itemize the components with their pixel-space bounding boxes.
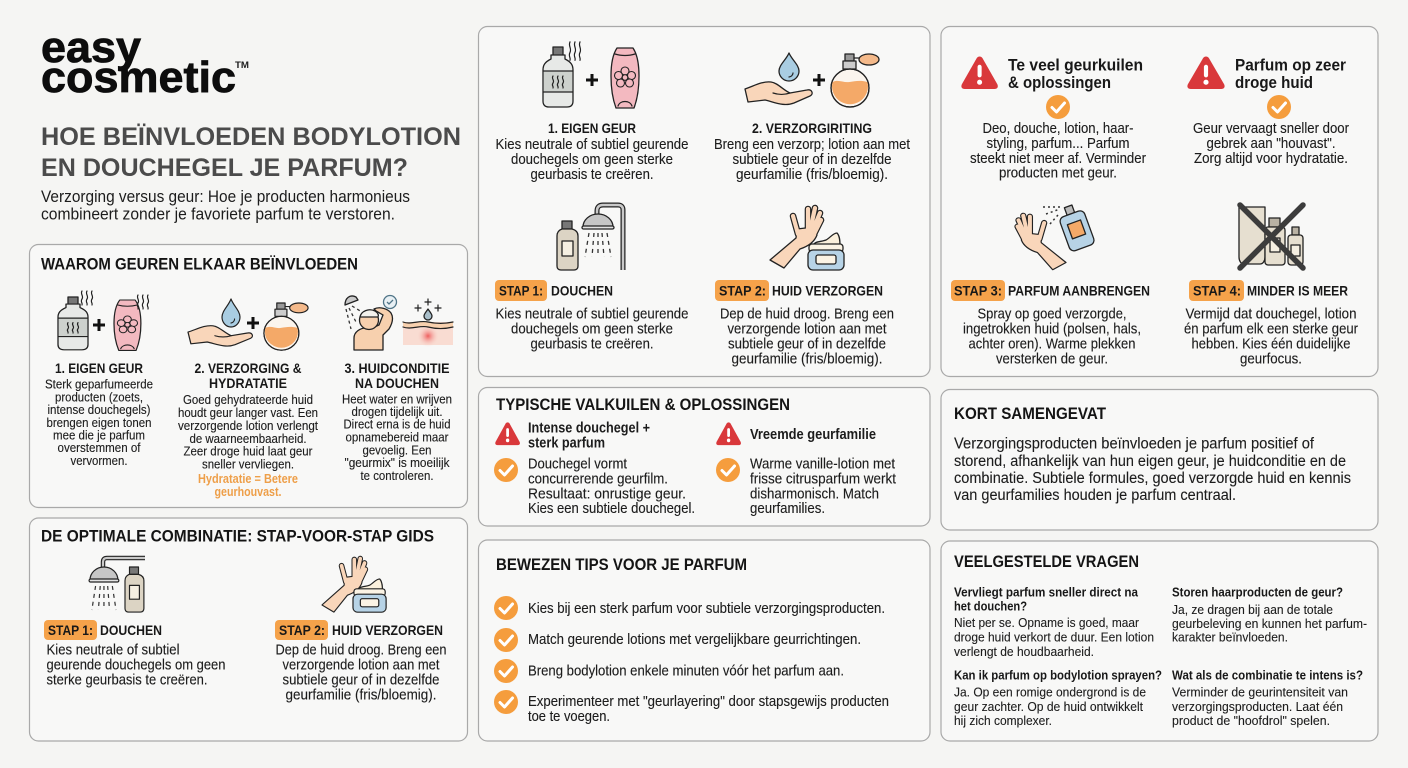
text: te veel geurkuilen: producten met geur. (999, 166, 1117, 182)
icon: crossed-out products (1239, 205, 1303, 268)
step 3 text: versterken de geur. (996, 352, 1108, 368)
step 4 text: Vermijd dat douchegel, lotion (1186, 306, 1356, 322)
step 1 text: Kies neutrale of subtiel geurende (496, 306, 688, 322)
step 2 text: Dep de huid droog. Breng een (720, 306, 894, 322)
faq 3 (954, 667, 1162, 728)
icon: check (1267, 95, 1291, 119)
heading: te veel geurkuilen: Te veel geurkuilen (1008, 56, 1143, 74)
step 3 text: ingetrokken huid (polsen, hals, (963, 322, 1141, 338)
step 3 badge: STAP 3: (954, 282, 1002, 298)
text: huidconditie na douchen: NA DOUCHEN (355, 375, 439, 391)
step 3 text (963, 306, 1141, 368)
step 1 text (46, 642, 226, 688)
text: verzorging: geurfamilie (fris/bloemig). (736, 167, 888, 183)
tip 2 (494, 628, 861, 652)
step 1 badge: DOUCHEN (100, 622, 162, 638)
heading: parfum op zeer droge huid: droge huid (1235, 74, 1313, 92)
step 1 badge (495, 280, 613, 301)
step 1 text: Kies neutrale of subtiel (46, 642, 180, 658)
highlight text: geurhouvast. (214, 485, 282, 499)
text: eigen geur: geurbasis te creëren. (530, 167, 654, 183)
heading: BEWEZEN TIPS VOOR JE PARFUM (496, 555, 747, 574)
heading: parfum op zeer droge huid: Parfum op zeer (1235, 56, 1347, 74)
icon: warning (961, 56, 998, 89)
step 1 badge: STAP 1: (499, 282, 543, 298)
step 1 badge: STAP 1: (48, 622, 93, 638)
summary text: combinatie. Subtiele formules, goed verzorgde huid en kennis (954, 470, 1351, 487)
faq 4: product de "hoofdrol" spelen. (1172, 713, 1330, 728)
tip 2: Match geurende lotions met vergelijkbare geurrichtingen. (528, 632, 861, 648)
faq 1: droge huid verkort de duur. Een lotion (954, 630, 1154, 645)
tip 4: toe te voegen. (528, 709, 610, 725)
text: eigen geur: 1. EIGEN GEUR (55, 360, 143, 376)
text: eigen geur: overstemmen of (58, 440, 141, 455)
summary text (954, 436, 1351, 504)
step 1 text: douchegels om geen sterke (511, 322, 673, 338)
faq 3: hij zich complexer. (954, 713, 1052, 728)
step 2 text: subtiele geur of in dezelfde (282, 672, 440, 688)
icon: hand and perfume spray (1018, 202, 1095, 270)
step 2 text: geurfamilie (fris/bloemig). (286, 688, 436, 704)
icon: warning (495, 422, 520, 445)
panel: waarom geuren elkaar beïnvloeden (30, 244, 468, 508)
faq 4: Wat als de combinatie te intens is? (1172, 667, 1363, 682)
heading: parfum op zeer droge huid (1235, 56, 1347, 92)
faq 4 (1172, 667, 1363, 728)
heading: te veel geurkuilen: & oplossingen (1008, 74, 1111, 92)
text: huidconditie na douchen: Direct erna is de huid (344, 416, 450, 432)
text: huidconditie na douchen: 3. HUIDCONDITIE (344, 360, 450, 376)
step 2 text: verzorgende lotion aan met (282, 658, 440, 674)
step 4 text: hebben. Kies één duidelijke (1192, 336, 1350, 352)
faq 4: Verminder de geurintensiteit van (1172, 685, 1348, 700)
tip 1 (494, 596, 885, 620)
step 2 text: geurfamilie (fris/bloemig). (732, 352, 882, 368)
step 3 text: Spray op goed verzorgde, (978, 306, 1126, 322)
icon: shower and bottle (89, 558, 145, 612)
text: te veel geurkuilen (970, 121, 1146, 182)
step 2 badge: STAP 2: (719, 282, 766, 298)
panel: valkuilen en stappen 3 en 4 (941, 26, 1378, 376)
text: verzorging en hydratatie: HYDRATATIE (209, 375, 287, 391)
text: eigen geur: douchegels om geen sterke (511, 152, 673, 168)
step 2 text: Dep de huid droog. Breng een (276, 642, 446, 658)
logo: TM (235, 60, 249, 70)
icon: check (494, 458, 518, 482)
pitfall title: intense douchegel (528, 421, 650, 452)
text: parfum op droge huid: gebrek aan "houvast". (1206, 136, 1336, 152)
faq 2: Storen haarproducten de geur? (1172, 585, 1343, 600)
text: huidconditie na douchen: drogen tijdelijk uit. (352, 404, 442, 419)
panel: bewezen tips (478, 540, 930, 741)
step 4 text: geurfocus. (1240, 352, 1302, 368)
logo (41, 23, 249, 102)
step 2 text: subtiele geur of in dezelfde (728, 336, 886, 352)
text: huidconditie na douchen (342, 360, 452, 483)
subtitle: Verzorging versus geur: Hoe je producten harmonieus (41, 188, 410, 206)
tip 4: Experimenteer met "geurlayering" door stapsgewijs producten (528, 694, 889, 710)
text: huidconditie na douchen: opnamebereid maar (346, 430, 449, 444)
panel: kort samengevat (941, 390, 1378, 530)
step 3 text: achter oren). Warme plekken (968, 336, 1136, 352)
tip 1: Kies bij een sterk parfum voor subtiele verzorgingsproducten. (528, 601, 885, 617)
icon: warning (716, 422, 741, 445)
icon: person showering and skin cross-section (345, 296, 453, 350)
text: huidconditie na douchen: te controleren. (360, 468, 434, 483)
step 2 badge: STAP 2: (279, 622, 325, 638)
text: verzorging en hydratatie: Goed gehydrateerde huid (183, 392, 313, 407)
title: EN DOUCHEGEL JE PARFUM? (41, 154, 408, 182)
text: verzorging en hydratatie: de waarneembaarheid. (190, 431, 306, 446)
pitfall title: vreemde geurfamilie: Vreemde geurfamilie (750, 427, 876, 443)
icon: check (716, 458, 740, 482)
faq 2 (1172, 585, 1367, 645)
text: verzorging: Breng een verzorp; lotion aan met (714, 137, 910, 153)
text: eigen geur: Sterk geparfumeerde (45, 376, 153, 392)
text: eigen geur: intense douchegels) (48, 402, 150, 417)
text: eigen geur: vervormen. (70, 453, 128, 468)
text: huidconditie na douchen: "geurmix" is moeilijk (344, 455, 450, 470)
subtitle (41, 188, 410, 224)
text: parfum op droge huid: Zorg altijd voor hydratatie. (1194, 151, 1348, 167)
pitfall solution text: Warme vanille-lotion met (750, 456, 895, 472)
step 2 badge: HUID VERZORGEN (332, 622, 443, 638)
text: te veel geurkuilen: steekt niet meer af. Verminder (970, 151, 1146, 167)
text: parfum op droge huid: Geur vervaagt sneller door (1193, 121, 1349, 137)
tip 4 (494, 690, 889, 725)
icon: bottle plus shower gel (543, 42, 639, 108)
summary text: van geurfamilies houden je parfum centraal. (954, 487, 1236, 504)
text: verzorging en hydratatie (178, 360, 318, 499)
icon: bottle plus shower gel (58, 291, 149, 350)
text: huidconditie na douchen: Heet water en wrijven (342, 392, 452, 406)
pitfall solution text: concurrerende geurfilm. (528, 472, 668, 488)
faq 3: geur zachter. Op de huid ontwikkelt (954, 699, 1143, 714)
panel: veelgestelde vragen (941, 541, 1378, 741)
icon: check (1046, 95, 1070, 119)
faq 2: karakter beïnvloeden. (1172, 630, 1288, 645)
text: huidconditie na douchen: gevoelig. Een (362, 442, 432, 458)
logo: easy (41, 23, 142, 72)
text: te veel geurkuilen: Deo, douche, lotion, haar- (982, 121, 1134, 137)
step 1 text (496, 306, 688, 352)
faq 2: Ja, ze dragen bij aan de totale (1172, 602, 1333, 617)
tip 3: Breng bodylotion enkele minuten vóór het parfum aan. (528, 664, 844, 680)
step 2 text: verzorgende lotion aan met (728, 322, 886, 338)
faq 1: verlengt de houdbaarheid. (954, 644, 1094, 659)
faq 3: Ja. Op een romige ondergrond is de (954, 685, 1146, 700)
text: eigen geur: mee die je parfum (53, 428, 145, 442)
title (41, 123, 461, 182)
logo: cosmetic (41, 53, 236, 102)
subtitle: combineert zonder je favoriete parfum te verstoren. (41, 206, 395, 224)
faq 1: het douchen? (954, 599, 1027, 614)
text: verzorging en hydratatie: verzorgende lotion verlengt (178, 418, 318, 433)
step 1 badge: DOUCHEN (551, 282, 613, 298)
icon: warning (1187, 56, 1225, 89)
faq 2: geurbeleving en kunnen het parfum- (1172, 616, 1367, 631)
text: verzorging en hydratatie: sneller vervliegen. (202, 456, 294, 472)
heading: VEELGESTELDE VRAGEN (954, 552, 1139, 571)
heading: KORT SAMENGEVAT (954, 404, 1107, 423)
title: HOE BEÏNVLOEDEN BODYLOTION (41, 123, 461, 151)
heading: DE OPTIMALE COMBINATIE: STAP-VOOR-STAP GIDS (41, 526, 434, 546)
heading: te veel geurkuilen (1008, 56, 1143, 92)
step 2 badge (275, 620, 443, 640)
summary text: Verzorgingsproducten beïnvloeden je parfum positief of (954, 436, 1315, 452)
summary text: storend, afhankelijk van hun eigen geur, je huidconditie en de (954, 453, 1346, 470)
pitfall solution text: Douchegel vormt (528, 456, 627, 472)
pitfall title: intense douchegel: Intense douchegel + (528, 421, 650, 437)
step 1 badge (44, 620, 162, 640)
pitfall solution text (528, 456, 695, 517)
text: eigen geur: 1. EIGEN GEUR (548, 120, 636, 136)
text: eigen geur: brengen eigen tonen (46, 415, 152, 430)
step 3 badge (951, 280, 1150, 301)
tip 3 (494, 659, 844, 683)
panel: stappen 1 en 2 (478, 26, 930, 376)
pitfall solution text: disharmonisch. Match (750, 486, 879, 502)
step 3 badge: PARFUM AANBRENGEN (1008, 282, 1150, 298)
faq 1: Vervliegt parfum sneller direct na (954, 585, 1139, 600)
faq 4: verzorgingsproducten. Laat één (1172, 699, 1343, 714)
pitfall solution text: frisse citrusparfum werkt (750, 472, 896, 488)
text: verzorging: subtiele geur of in dezelfde (732, 152, 892, 168)
faq 1: Niet per se. Opname is goed, maar (954, 615, 1140, 630)
step 2 badge: HUID VERZORGEN (772, 282, 883, 298)
faq 3: Kan ik parfum op bodylotion sprayen? (954, 667, 1162, 682)
step 4 text (1184, 306, 1358, 368)
text: verzorging: 2. VERZORGIRITING (752, 120, 872, 136)
step 4 badge (1189, 280, 1348, 301)
heading: WAAROM GEUREN ELKAAR BEÏNVLOEDEN (41, 254, 358, 274)
text: te veel geurkuilen: styling, parfum... Parfum (986, 136, 1130, 152)
panel: typische valkuilen en oplossingen (478, 388, 930, 526)
highlight text (198, 472, 298, 499)
icon: bottle and shower (557, 205, 623, 270)
pitfall solution text: geurfamilies. (750, 501, 825, 517)
icon: hand with drop plus perfume (745, 53, 879, 107)
step 2 text (720, 306, 894, 368)
text: eigen geur: producten (zoets, (55, 390, 143, 404)
pitfall solution text: Kies een subtiele douchegel. (528, 501, 695, 517)
text: eigen geur: Kies neutrale of subtiel geurende (496, 137, 688, 153)
icon: arm and cream jar (322, 559, 386, 612)
icon: arm and cream jar (770, 208, 844, 270)
text: verzorging en hydratatie: 2. VERZORGING & (194, 360, 302, 376)
step 4 badge: STAP 4: (1193, 282, 1241, 298)
icon: hand with drop plus perfume (188, 299, 308, 350)
step 1 text: sterke geurbasis te creëren. (46, 672, 208, 688)
heading: TYPISCHE VALKUILEN & OPLOSSINGEN (496, 395, 790, 414)
text: parfum op droge huid (1193, 121, 1349, 167)
step 2 text (276, 642, 446, 704)
step 4 badge: MINDER IS MEER (1247, 282, 1348, 298)
faq 1 (954, 585, 1154, 659)
pitfall solution text: Resultaat: onrustige geur. (528, 486, 686, 502)
pitfall title: intense douchegel: sterk parfum (528, 436, 605, 452)
text: eigen geur (496, 120, 688, 183)
text: verzorging en hydratatie: houdt geur langer vast. Een (178, 405, 318, 420)
pitfall solution text (750, 456, 896, 517)
text: verzorging en hydratatie: Zeer droge huid laat geur (184, 444, 313, 458)
highlight text: Hydratatie = Betere (198, 472, 298, 486)
step 4 text: én parfum elk een sterke geur (1184, 322, 1358, 338)
step 1 text: geurbasis te creëren. (530, 336, 654, 352)
step 2 badge (715, 280, 883, 301)
panel: de optimale combinatie (30, 518, 468, 741)
step 1 text: geurende douchegels om geen (46, 658, 226, 674)
text: eigen geur (45, 360, 153, 468)
text: verzorging (714, 120, 910, 183)
